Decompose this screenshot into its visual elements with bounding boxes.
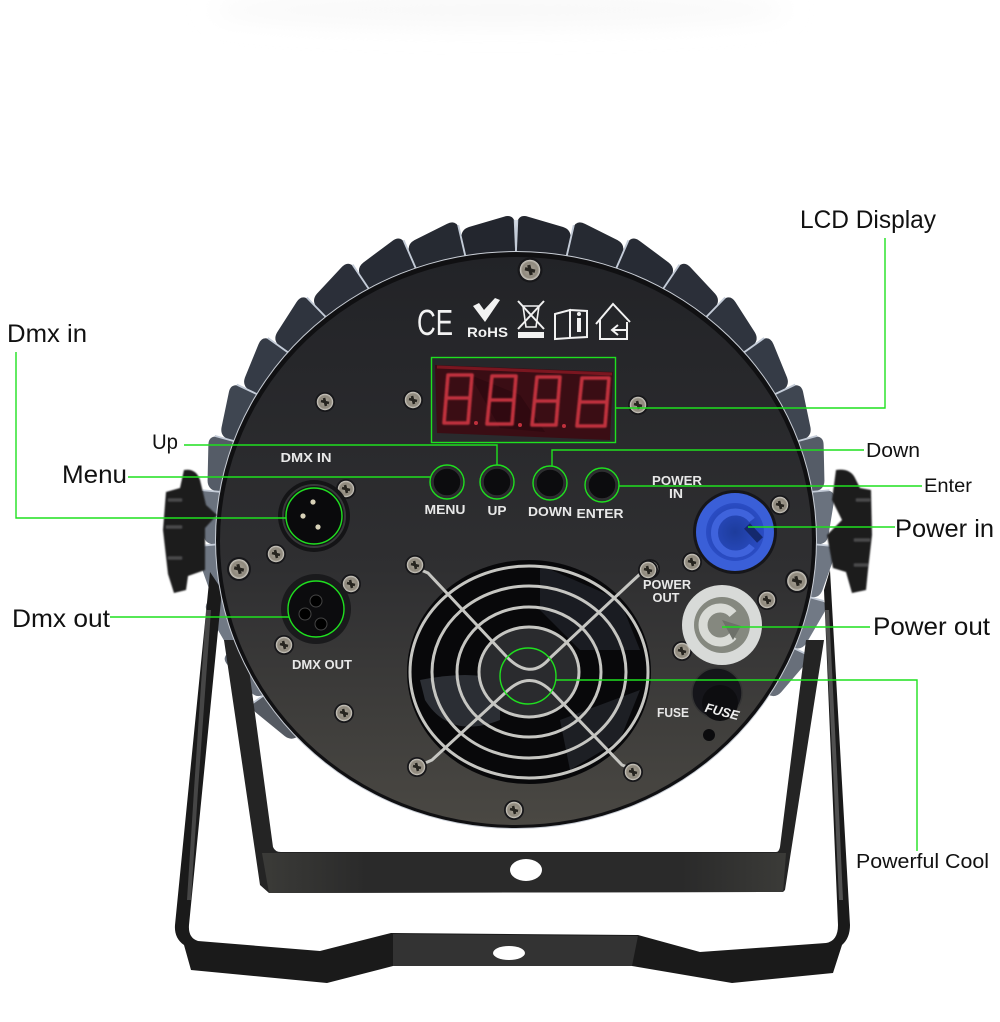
callout: Power out: Power out [873, 613, 990, 641]
buttons [433, 468, 616, 499]
inner bracket hole [510, 859, 542, 881]
digit 4 [577, 378, 609, 426]
callout: Dmx out [12, 581, 344, 637]
panel text labels: OUT [652, 591, 680, 605]
icon: CE mark: CE [417, 302, 453, 343]
digit 3 [532, 377, 560, 425]
callout: Enter [585, 468, 973, 502]
left knob [163, 470, 217, 593]
fan guard rings [410, 566, 648, 778]
callout: Enter: Enter [924, 476, 973, 497]
right knob [827, 470, 872, 593]
callout: Dmx in: Dmx in [7, 320, 87, 348]
callout: Down [533, 440, 920, 500]
panel text labels: POWER [652, 474, 702, 488]
icon: crossed-out bin [518, 301, 544, 338]
panel text labels: MENU [424, 503, 466, 517]
callout: LCD Display [432, 206, 936, 442]
panel text labels: ENTER [576, 507, 624, 521]
callout: Dmx out: Dmx out [12, 605, 110, 633]
fuse holder: FUSE [703, 700, 741, 723]
callout: Power in: Power in [895, 515, 994, 543]
fan guard wires [421, 564, 646, 768]
callout: Powerful Cool: Powerful Cool [856, 851, 989, 873]
callout: Down: Down [866, 440, 920, 462]
DMX in connector [278, 480, 350, 552]
background smudge [210, 0, 790, 26]
callout: LCD Display: LCD Display [800, 206, 936, 234]
compliance icons [417, 298, 630, 343]
icon: indoor house [596, 304, 630, 339]
callout: Up: Up [152, 431, 178, 454]
fuse holder [692, 668, 742, 741]
panel text labels [280, 451, 702, 720]
power out connector [682, 585, 762, 665]
fan screws [405, 555, 658, 782]
icon: RoHS check: RoHS [467, 324, 508, 340]
screws [227, 258, 809, 820]
panel text labels: DMX OUT [292, 658, 352, 672]
callout: Menu [62, 461, 464, 499]
LED display [435, 365, 613, 440]
callout: Dmx in [7, 320, 342, 544]
icon: manual book [555, 310, 587, 339]
panel text labels: POWER [643, 578, 691, 592]
digit 2 [487, 376, 516, 424]
outer mounting bracket [175, 570, 850, 983]
panel text labels: UP [488, 504, 506, 518]
icon: RoHS check [467, 298, 508, 340]
callout: Up [152, 431, 514, 499]
rear panel disc [215, 251, 817, 829]
cooling fan [405, 555, 658, 784]
outer bracket hole [493, 946, 525, 960]
digit 1 [444, 375, 472, 423]
inner mounting bracket [224, 640, 824, 893]
DMX out connector [281, 574, 351, 644]
panel text labels: IN [669, 487, 683, 501]
panel text labels: DMX IN [280, 451, 332, 465]
panel text labels: FUSE [657, 706, 689, 720]
panel text labels: DOWN [528, 505, 572, 519]
cooling fins [195, 215, 837, 747]
power in connector [693, 490, 777, 574]
callout: Powerful Cool [500, 648, 989, 873]
callout: Menu: Menu [62, 461, 127, 489]
